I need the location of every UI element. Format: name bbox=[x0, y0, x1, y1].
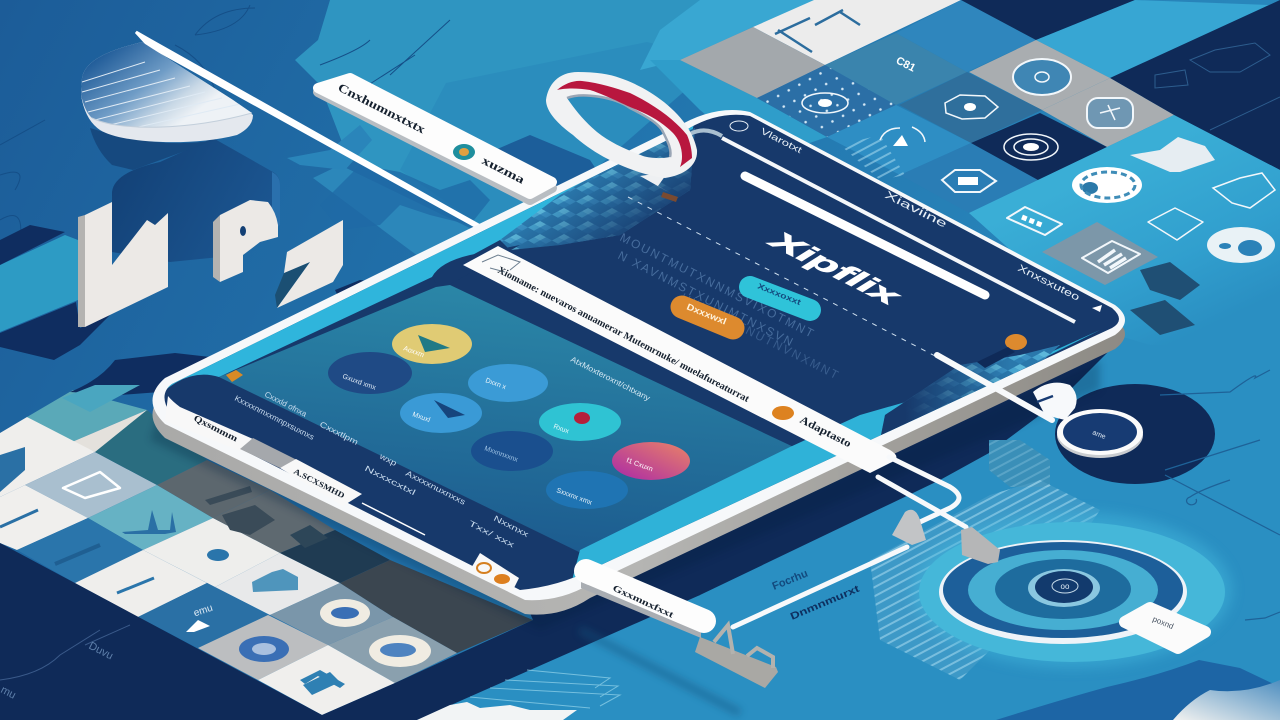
lower strip text bbox=[233, 390, 530, 549]
top bar texts and icons: Xnxsxuteo bbox=[1016, 263, 1082, 304]
circle cyan bbox=[539, 403, 621, 441]
icon: globe bbox=[730, 121, 748, 131]
circle pink bbox=[612, 442, 690, 480]
orange icons bbox=[477, 563, 510, 584]
doodle outlines top left bbox=[0, 5, 450, 240]
cyan pill button: Xxxxoxxt bbox=[756, 282, 803, 307]
cylinder base bbox=[112, 138, 280, 262]
icon: light blue shape bbox=[252, 569, 298, 592]
pill callout top bbox=[318, 78, 552, 200]
text near disc: Focrhu bbox=[771, 568, 810, 593]
faint text rows bbox=[616, 230, 842, 383]
tile icons: top right bbox=[775, 10, 1280, 335]
orange pill button: Dxxxwxl bbox=[685, 302, 728, 327]
teal panel label: AtxMoxteroxnt/chtxany bbox=[569, 355, 652, 403]
icon: dotted circle bbox=[802, 93, 848, 113]
faint text rows: UXMNVSTNUTNVNXMNT bbox=[679, 290, 842, 383]
strip text: Xiomame: nuevaros anuamerar Mutemrnuke/ muelafureaturrat bbox=[496, 265, 751, 405]
circle yellow: Aoxxm bbox=[402, 345, 425, 359]
tab 1 label: Qxsmmm bbox=[192, 413, 240, 444]
circle pink: f1 Cxuxn bbox=[625, 457, 654, 473]
icon: blue dash bbox=[117, 578, 154, 593]
faint text rows: MOUNTMUTXNNMSVIXOTMNT bbox=[618, 230, 818, 341]
icon: figures bbox=[122, 510, 176, 534]
stripe lines bottom bbox=[470, 670, 620, 708]
circle blue 2: Mxuxl bbox=[411, 411, 431, 424]
lower strip text: Txx/ xxx bbox=[467, 519, 516, 549]
text near disc: Dnmnmurxt bbox=[789, 583, 862, 623]
tablet device bbox=[150, 100, 1150, 615]
icon: white bell bbox=[186, 620, 210, 632]
navy band and lower left navy: Duvu bbox=[87, 640, 115, 662]
circle blue: Dxxn x bbox=[484, 377, 507, 391]
navy map outlines bbox=[1155, 43, 1280, 130]
icon: rounded keypad bbox=[1007, 207, 1062, 235]
tile text: emu bbox=[192, 603, 214, 619]
gray tab bbox=[892, 510, 926, 545]
orange pill button bbox=[682, 302, 733, 328]
bottom pill label: Gxxmnxfxxt bbox=[611, 583, 675, 620]
tile label: C81 bbox=[894, 55, 917, 75]
icon: plate white bbox=[320, 599, 370, 627]
screen bbox=[150, 100, 1150, 600]
tile mosaic: bottom left bbox=[0, 390, 533, 715]
letter Z bbox=[275, 220, 343, 308]
white long pill bbox=[745, 176, 985, 295]
disc center label: oo bbox=[1061, 582, 1070, 591]
circle deep blue bbox=[546, 471, 628, 509]
icon: gray circle bbox=[1013, 59, 1071, 95]
faint text rows: N XAVNMSTXUNIMTNXSVN bbox=[616, 248, 797, 350]
gray bracket bbox=[961, 527, 1000, 564]
tile mosaic: top right bbox=[680, 0, 1280, 345]
icon: dotted white disc bbox=[1072, 167, 1142, 203]
lower strip text: Axxxxnuxnxxs bbox=[404, 469, 467, 507]
tab 3 bbox=[470, 553, 519, 592]
ring band bbox=[546, 72, 697, 178]
icon: hex screen bbox=[942, 170, 996, 192]
icon: dark dash bbox=[55, 545, 100, 564]
strip brand: Adaptasto bbox=[798, 414, 853, 450]
top bar texts and icons bbox=[730, 121, 1102, 312]
ring inner shade bbox=[567, 95, 671, 157]
gray bag bbox=[695, 625, 778, 688]
logo: Xipflix bbox=[760, 229, 912, 309]
red stripe bbox=[557, 81, 692, 167]
navy base bbox=[150, 100, 1150, 600]
icon: signal arcs bbox=[880, 127, 925, 146]
icon: film frame bbox=[63, 472, 120, 498]
shadow icons bbox=[205, 486, 328, 548]
background light areas bbox=[295, 0, 1280, 720]
app circles bbox=[328, 324, 690, 509]
tab gray bbox=[240, 438, 297, 468]
tablet face bbox=[152, 110, 1125, 600]
lower strip text: Cxxxld ofnxa bbox=[263, 390, 309, 419]
icon: blue fish bbox=[207, 549, 229, 561]
pin connector bbox=[937, 355, 1143, 458]
cyan pill button bbox=[750, 282, 810, 310]
cyan band bbox=[167, 126, 694, 389]
disc glow and concentric device bbox=[870, 480, 1232, 680]
left navy silhouettes and cyan tile bbox=[0, 225, 375, 412]
ring tail bbox=[640, 172, 678, 202]
bottom pill label bbox=[581, 571, 704, 638]
circle cyan: Rxux bbox=[552, 423, 570, 436]
navy band and lower left navy bbox=[0, 340, 1215, 720]
lower strip text: Kxxxxnmxxmnpxsuxnxs bbox=[233, 394, 316, 442]
tile icons: bottom left bbox=[0, 447, 431, 695]
icon: outline badge bbox=[1148, 208, 1203, 240]
lower strip text: Nxxxcxtxl bbox=[363, 464, 417, 497]
disc center label bbox=[1052, 579, 1078, 593]
lower strip text: Nxxnxx bbox=[492, 514, 530, 539]
lower strip text: wxp bbox=[377, 451, 399, 468]
dashed guide line bbox=[628, 197, 937, 357]
circle deep blue: Sxxxnx xmx bbox=[555, 487, 593, 507]
icon: plate blue bbox=[239, 636, 289, 662]
mosaic top bbox=[500, 128, 695, 250]
circle blue bbox=[468, 364, 548, 402]
icon: concentric bbox=[1004, 134, 1058, 160]
disk neck shadow bbox=[90, 128, 215, 170]
bottom right blue shape and cloud bbox=[996, 660, 1280, 720]
ground shadow line bbox=[580, 630, 740, 713]
circle navy bbox=[328, 352, 412, 394]
thin line to tablet bbox=[136, 32, 484, 231]
icon: white tile bars bbox=[775, 10, 860, 52]
tablet shadow bbox=[150, 360, 1100, 630]
pill callout top: Cnxhumnxtxtx bbox=[336, 80, 428, 136]
small orange tag and tab bbox=[226, 334, 1027, 382]
icon: orange circle bbox=[772, 406, 794, 420]
tablet side bbox=[152, 124, 1125, 615]
circle navy: Gxuxd xmx bbox=[341, 373, 377, 392]
icon: white torn shape bbox=[1130, 137, 1215, 172]
cyan lower band bbox=[572, 330, 1100, 580]
circle yellow bbox=[392, 324, 472, 364]
tab 2 bbox=[280, 459, 362, 506]
icon: menu square bbox=[1082, 241, 1140, 273]
pill callout top: xuzma bbox=[480, 153, 527, 187]
letter N bbox=[78, 202, 168, 327]
circle navy blue: Mxxnnxxnx bbox=[483, 445, 519, 464]
icon: blue dash bbox=[0, 510, 38, 527]
icon: hand bbox=[482, 255, 520, 272]
dark scattered shapes bbox=[1130, 262, 1200, 335]
lower strip text: Cxxxtlpm bbox=[318, 420, 360, 447]
icon: blue bars bbox=[300, 670, 345, 695]
icon: plate large bbox=[369, 635, 431, 667]
icon: pentagon bbox=[0, 447, 25, 492]
pin connector: ame bbox=[1091, 429, 1107, 441]
letter P bbox=[213, 200, 278, 282]
navy top bar line bbox=[722, 138, 1075, 322]
icon: hexagon badge bbox=[945, 95, 998, 119]
white splash bottom bbox=[417, 702, 577, 720]
striped disk bbox=[81, 42, 253, 142]
circle navy blue bbox=[471, 431, 553, 471]
tab 2 label: A.SCXSMHD bbox=[292, 467, 346, 500]
navy left cap bbox=[432, 245, 520, 277]
white tabs bottom left bbox=[165, 396, 519, 592]
background silhouettes bbox=[287, 125, 600, 230]
strip white line bbox=[362, 503, 425, 535]
right side doodles bbox=[1160, 370, 1280, 620]
mosaic bottom bbox=[880, 345, 1060, 440]
ring with red stripe bbox=[546, 72, 697, 202]
tab 1 bbox=[165, 396, 253, 451]
icon: outline folder bbox=[1213, 173, 1275, 208]
top bar texts and icons: Vlarotxt bbox=[759, 126, 804, 156]
icon: rounded square bbox=[1087, 98, 1133, 128]
top bar texts and icons: Xiaviine bbox=[883, 189, 949, 231]
icon: white globe bbox=[1207, 227, 1275, 263]
circle blue 2 bbox=[400, 393, 482, 433]
text near disc bbox=[771, 568, 862, 623]
header strip bbox=[463, 246, 896, 473]
connector lines bbox=[733, 457, 966, 627]
white card on disc: poxnd bbox=[1151, 615, 1175, 631]
white card on disc bbox=[1125, 608, 1205, 648]
teal panel bbox=[219, 285, 800, 552]
